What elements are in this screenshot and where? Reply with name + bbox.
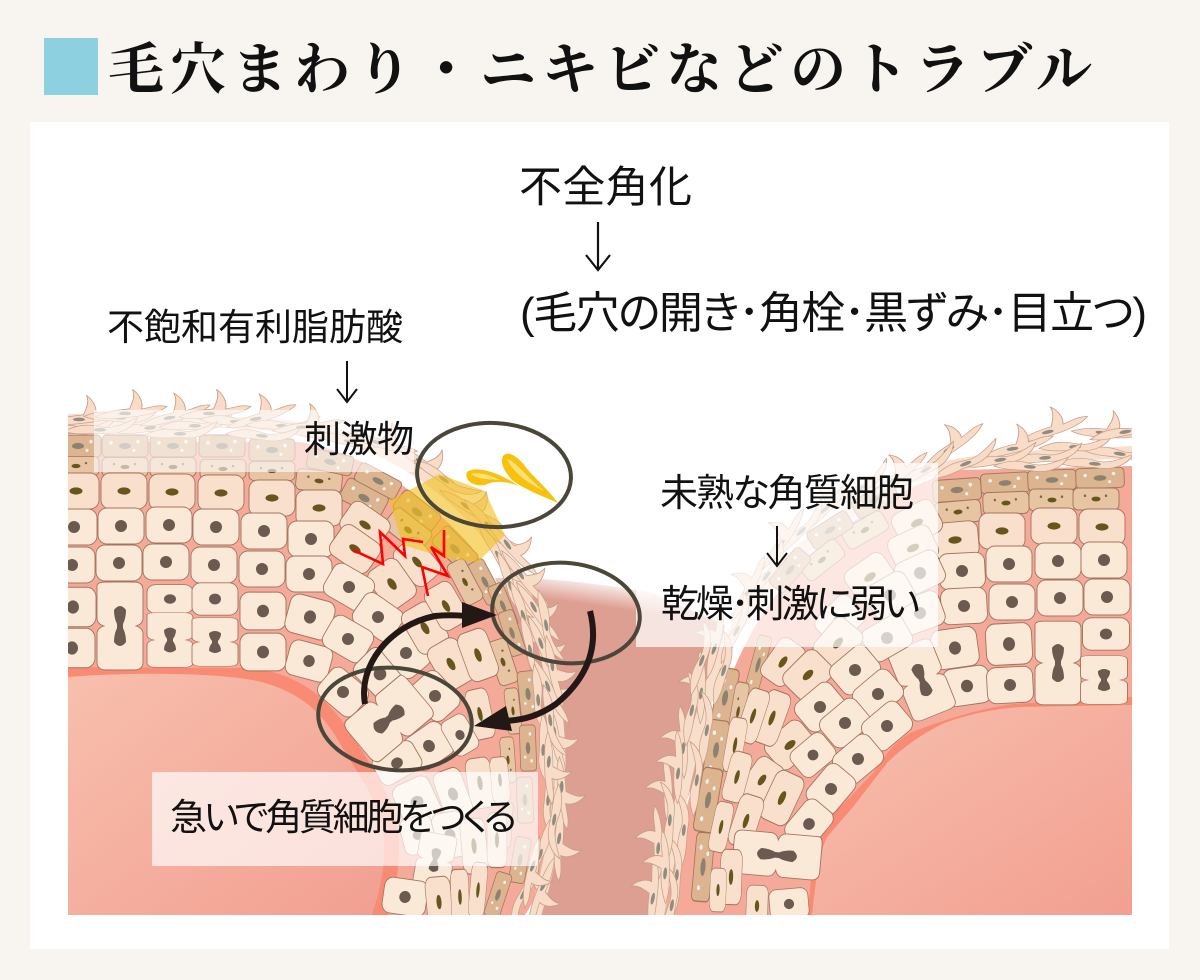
arrow: parakeratosis result: [586, 222, 610, 270]
right stratum corneum flakes, top band: [924, 406, 1132, 479]
dermis left: [68, 667, 399, 915]
right epidermis cells: [707, 496, 1130, 927]
label: irritant: 刺激物: [304, 419, 414, 460]
epidermis left: [68, 442, 556, 915]
yellow irritant patch: [389, 474, 505, 562]
pore cavity: [495, 578, 725, 915]
callout ellipse: basal layer: [316, 666, 474, 772]
arrow: immature to weak: [767, 526, 787, 566]
overlay behind immature cell label: [636, 463, 938, 647]
red irritation bolts: [353, 530, 448, 596]
callout ellipse: irritant: [414, 419, 574, 531]
right tan cell rows: [691, 467, 1124, 902]
title marker square: [44, 38, 98, 95]
left epidermis cells: [49, 473, 511, 928]
label: pore problems: (毛穴の開き･角栓･黒ずみ･目立つ): [520, 289, 1147, 338]
unsaturated fatty acid droplets: [466, 454, 558, 503]
right stratum corneum flakes, pore wall: [623, 438, 961, 941]
left stratum corneum flakes, top band: [68, 389, 418, 452]
label: parakeratosis: 不全角化: [519, 164, 692, 212]
overlay behind stimulus label: [94, 410, 414, 472]
horny layer ribbons: [68, 420, 1132, 930]
title: 毛穴まわり・ニキビなどのトラブル: [108, 40, 1092, 102]
left stratum corneum flakes, pore wall: [395, 425, 588, 934]
callout ellipse: pore wall: [490, 560, 642, 666]
label: rapidly makes keratinocytes: 急いで角質細胞をつくる: [170, 797, 517, 838]
arrow: fatty acid to irritant: [337, 361, 357, 402]
label: unsaturated fatty acid: 不飽和有利脂肪酸: [107, 307, 403, 348]
cycle arrow to basal layer: [474, 611, 593, 731]
left tan cell rows: [53, 435, 539, 919]
dermis right: [808, 697, 1132, 915]
cycle arrow to pore wall: [364, 602, 497, 704]
label: weak to dryness and irritation: 乾燥･刺激に弱い: [661, 584, 920, 626]
panel: skin cross-section diagram: [42, 388, 1163, 941]
epidermis right: [655, 466, 1132, 915]
label: immature keratinocytes: 未熟な角質細胞: [660, 473, 914, 515]
overlay behind rapid production label: [152, 772, 538, 866]
